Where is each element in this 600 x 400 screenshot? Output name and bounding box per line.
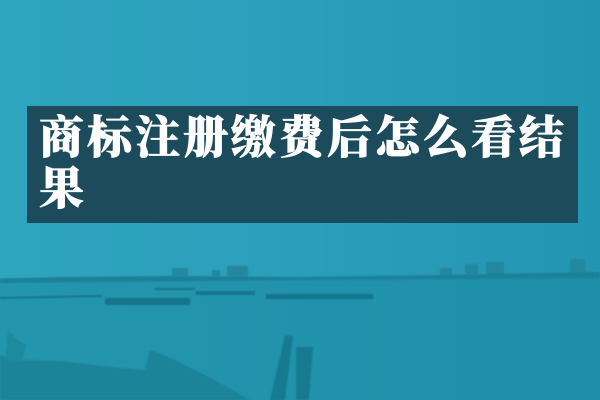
title panel <box>27 106 578 223</box>
wooden posts <box>270 335 313 400</box>
foreground shore and debris <box>0 350 250 400</box>
title: 商标注册缴费后怎么看结果 <box>39 113 567 214</box>
floating rafts <box>0 288 373 305</box>
far shoreline <box>0 272 600 283</box>
skyline buildings <box>172 259 585 277</box>
